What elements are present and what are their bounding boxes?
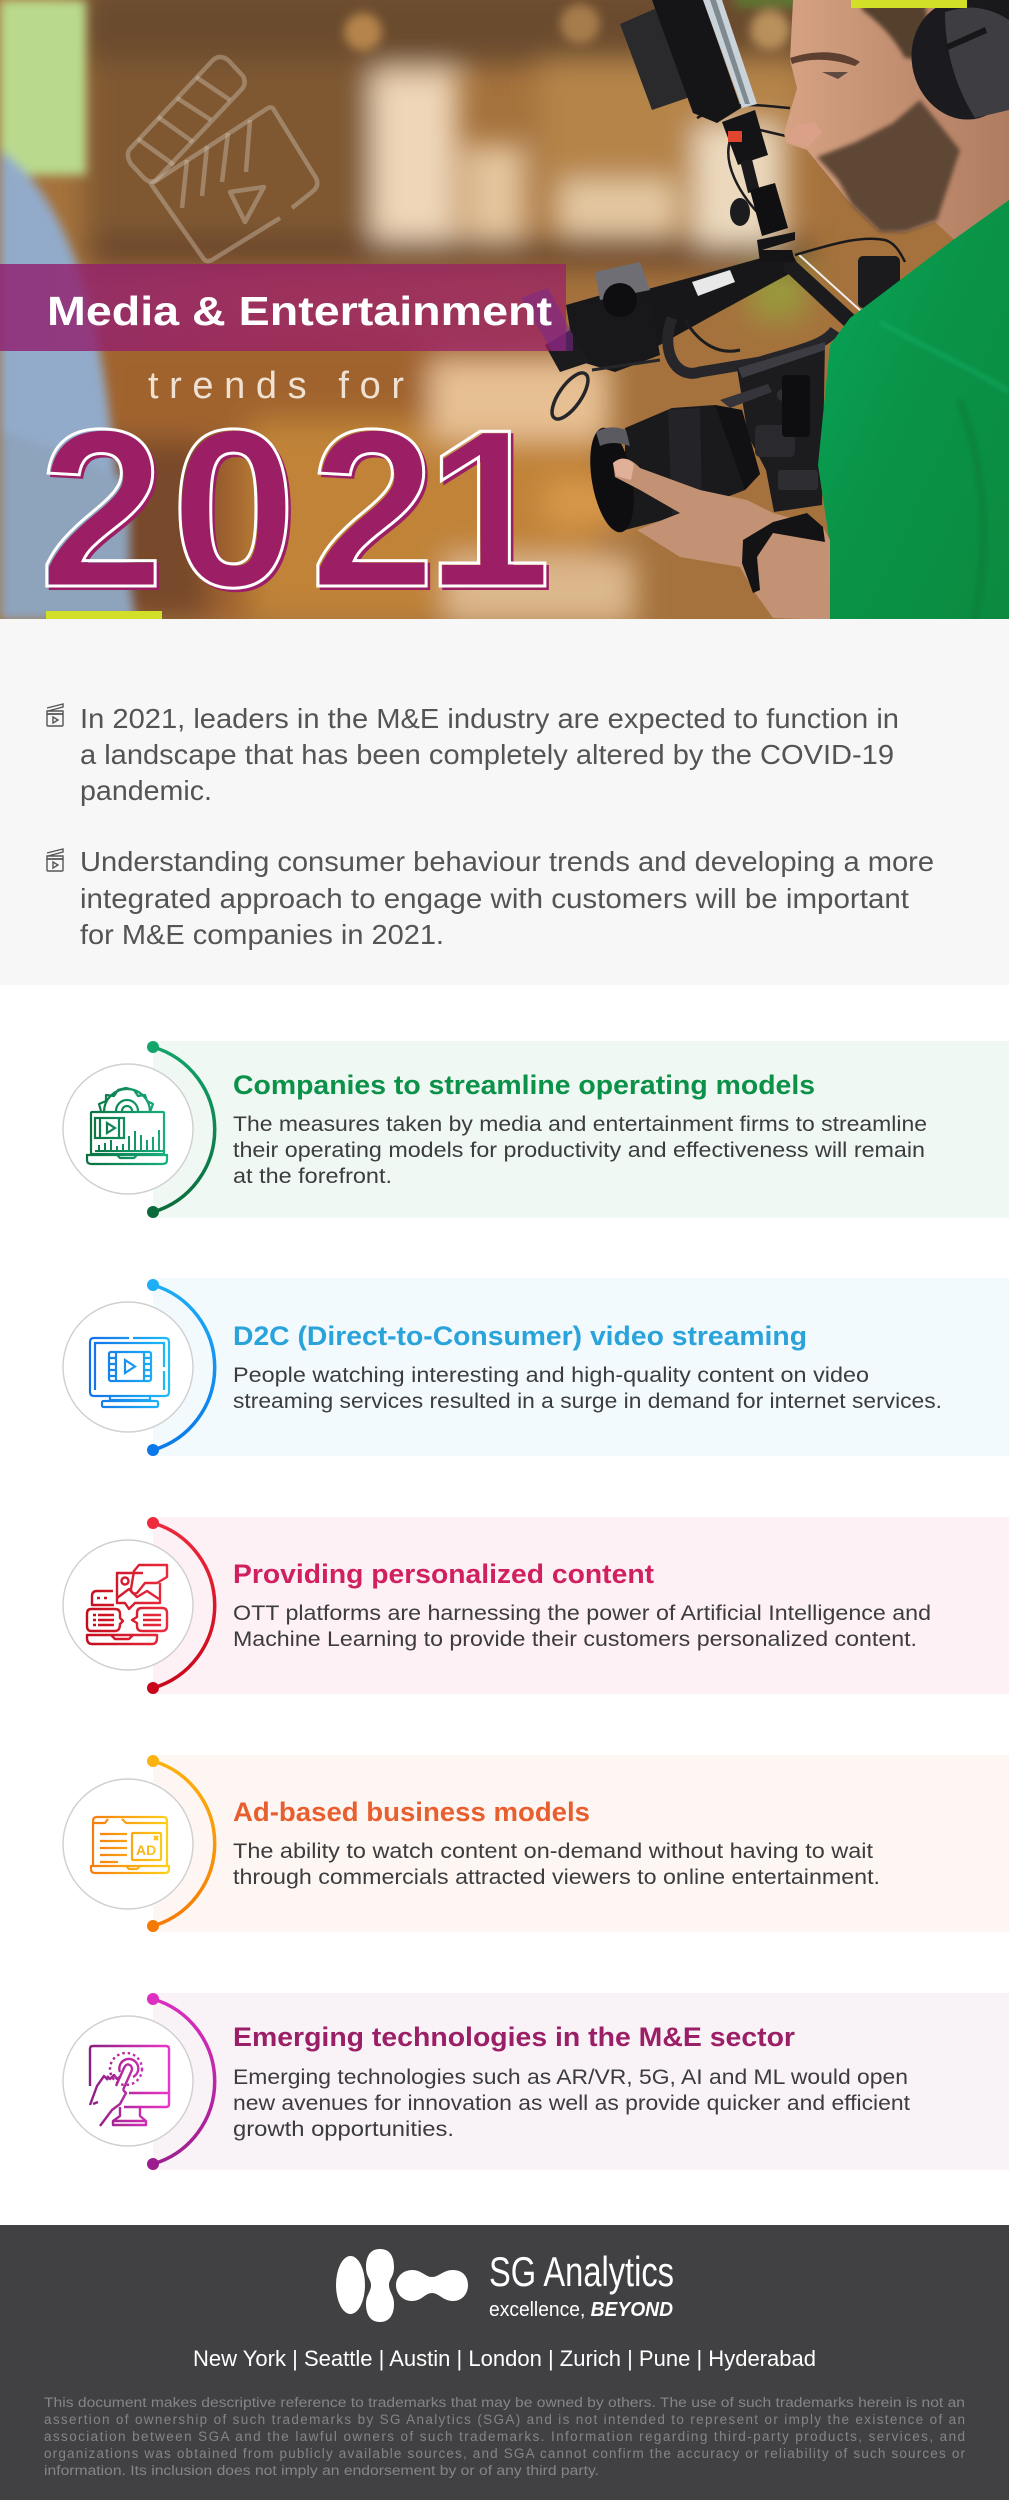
disclaimer <box>44 2395 966 2478</box>
arc with dots <box>147 1041 215 1218</box>
title band <box>0 264 566 351</box>
panel: emerging technologies <box>63 1993 1009 2170</box>
icon: touch screen monitor <box>90 2046 169 2126</box>
description: OTT platforms are harnessing the power of Artificial Intelligence and <box>233 1602 931 1625</box>
year 2021: 2021 <box>42 385 554 637</box>
description: The measures taken by media and entertainment firms to streamline <box>233 1113 927 1136</box>
photo: camera rig <box>545 0 905 424</box>
description: People watching interesting and high-quality content on video <box>233 1364 869 1387</box>
text: intro paragraph 1: pandemic. <box>80 775 212 806</box>
accent bar: bottom <box>46 611 162 619</box>
description: new avenues for innovation as well as provide quicker and efficient <box>233 2092 910 2115</box>
text: intro paragraph 1: In 2021, leaders in the M&E industry are expected to function in <box>80 703 899 734</box>
arc with dots <box>147 1279 215 1456</box>
text: intro paragraph 1 <box>80 703 899 806</box>
panel: D2C video streaming <box>63 1278 1009 1456</box>
icon: monitor with video <box>90 1338 169 1407</box>
accent bar: top <box>851 0 967 8</box>
description: at the forefront. <box>233 1165 392 1188</box>
arc with dots <box>147 1755 215 1932</box>
arc with dots <box>147 1517 215 1694</box>
panel: ad-based business models <box>63 1755 1009 1932</box>
description: The ability to watch content on-demand without having to wait <box>233 1840 873 1863</box>
footer <box>0 2225 1009 2500</box>
description <box>233 1364 942 1413</box>
panel: streamline operating models <box>63 1041 1009 1218</box>
description: streaming services resulted in a surge in demand for internet services. <box>233 1390 942 1413</box>
photo: man in green shirt <box>784 0 1009 620</box>
disclaimer: association between SGA and the lawful owners of such trademarks. Information regarding third-party products, services, and <box>44 2429 965 2444</box>
year 2021 <box>45 427 549 592</box>
description <box>233 1840 880 1889</box>
icon circle <box>63 1779 193 1909</box>
icon: bullet clapper 2 <box>47 849 63 871</box>
rig piece over band <box>521 288 573 351</box>
subtitle: trends for: trends for <box>148 365 404 407</box>
arc with dots <box>147 1993 215 2170</box>
photo: blurred studio background <box>0 0 1009 625</box>
disclaimer: assertion of ownership of such trademarks by SG Analytics (SGA) and is not intended to represent or imply the existence of an <box>44 2412 965 2427</box>
year 2021: 2021 <box>39 382 551 634</box>
disclaimer: organizations was obtained from publicly available sources, and SGA cannot confirm the accuracy or reliability of such sources or <box>44 2446 966 2461</box>
photo: hand and wrist <box>613 459 830 620</box>
panel: introduction <box>0 619 1009 985</box>
logo: wordmark: SG Analytics <box>489 2248 674 2295</box>
icon: bullet clapper 1 <box>47 704 63 726</box>
icon circle <box>63 2016 193 2146</box>
text: intro paragraph 2: Understanding consumer behaviour trends and developing a more <box>80 846 934 877</box>
icon circle <box>63 1540 193 1670</box>
title: Providing personalized content <box>233 1559 654 1589</box>
disclaimer: This document makes descriptive reference to trademarks that may be owned by others. The use of such trademarks herein is not an <box>44 2395 965 2410</box>
title: Emerging technologies in the M&E sector <box>233 2022 796 2052</box>
icon: browser with ad <box>91 1817 169 1873</box>
title: Media & Entertainment: Media & Entertainment <box>47 288 552 334</box>
icon: browser with ad: AD <box>136 1842 156 1858</box>
description <box>233 2066 910 2141</box>
description <box>233 1602 931 1651</box>
text: intro paragraph 2 <box>80 846 934 950</box>
title: Ad-based business models <box>233 1797 590 1827</box>
logo: tagline: excellence, BEYOND <box>489 2299 673 2321</box>
description: through commercials attracted viewers to online entertainment. <box>233 1866 880 1889</box>
description <box>233 1113 927 1188</box>
photo: camera body and lens <box>583 342 825 536</box>
logo: SG Analytics mark <box>336 2249 468 2322</box>
title: D2C (Direct-to-Consumer) video streaming <box>233 1321 807 1351</box>
icon: clapperboard watermark <box>128 57 317 261</box>
title: Companies to streamline operating models <box>233 1070 815 1100</box>
icon: laptop with gear and chart <box>87 1088 167 1164</box>
description: their operating models for productivity and effectiveness will remain <box>233 1139 925 1162</box>
text: intro paragraph 2: integrated approach to engage with customers will be important <box>80 883 909 914</box>
description: Machine Learning to provide their customers personalized content. <box>233 1628 917 1651</box>
text: intro paragraph 1: a landscape that has been completely altered by the COVID-19 <box>80 739 894 770</box>
icon circle <box>63 1302 193 1432</box>
icon circle <box>63 1064 193 1194</box>
hero banner <box>0 0 1009 637</box>
disclaimer: information. Its inclusion does not imply an endorsement by or of any third party. <box>44 2463 599 2478</box>
panel: personalized content <box>63 1517 1009 1694</box>
office locations: New York | Seattle | Austin | London | Zurich | Pune | Hyderabad <box>193 2346 816 2371</box>
icon: content bubbles on laptop <box>87 1565 167 1644</box>
description: Emerging technologies such as AR/VR, 5G, AI and ML would open <box>233 2066 908 2089</box>
description: growth opportunities. <box>233 2118 454 2141</box>
text: intro paragraph 2: for M&E companies in 2021. <box>80 919 444 950</box>
